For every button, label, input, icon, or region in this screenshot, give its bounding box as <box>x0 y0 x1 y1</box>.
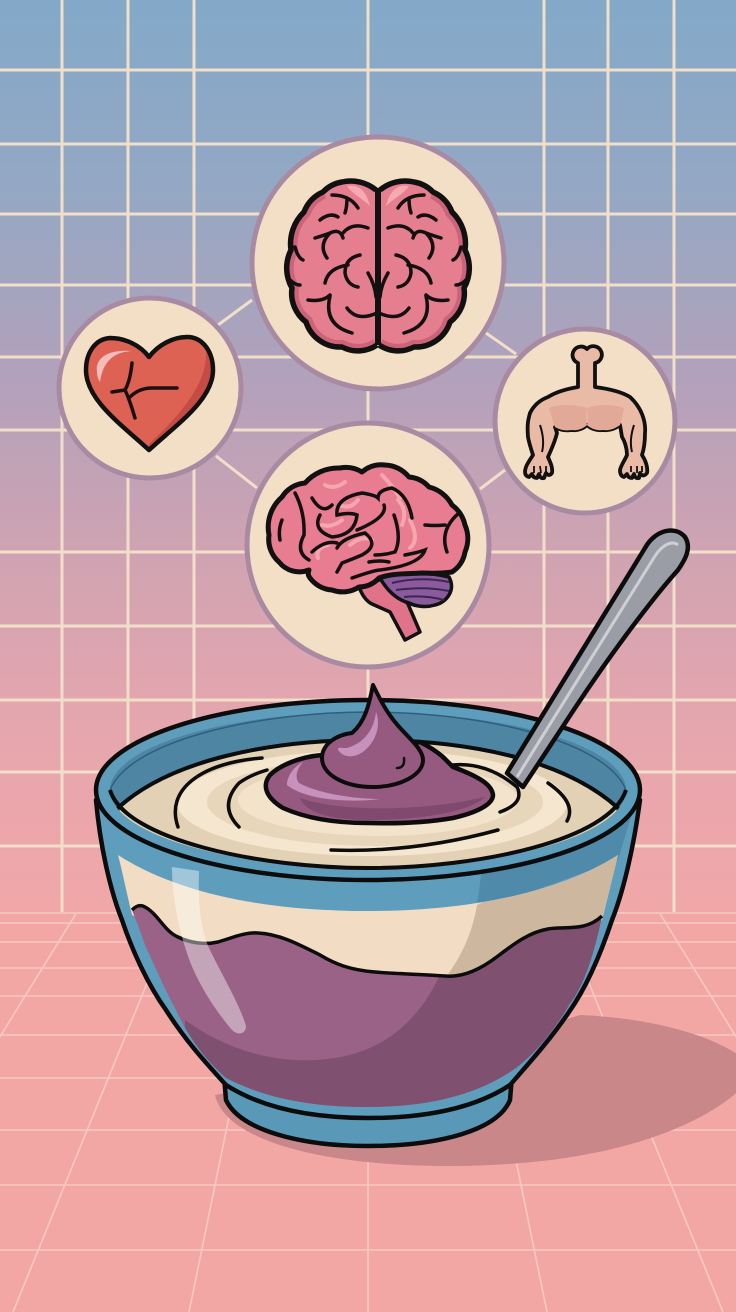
purple layer <box>132 906 602 1107</box>
cream layer <box>118 855 618 990</box>
rim outer <box>96 700 640 880</box>
purple shadow <box>185 918 602 1107</box>
rim inner top line <box>110 712 626 790</box>
pudding surface <box>116 739 620 866</box>
spoon <box>507 530 688 787</box>
icon: arms and bone <box>525 346 647 478</box>
wave line <box>132 906 602 976</box>
connector lines <box>216 300 516 489</box>
panel: arm muscle circle <box>495 329 675 513</box>
bowl shadow <box>215 1015 736 1166</box>
icon: brain side view <box>268 465 468 640</box>
bowl <box>96 700 640 1146</box>
icon: cracked heart <box>86 337 213 450</box>
bowl body <box>96 800 640 1118</box>
cream shaded side <box>448 855 618 974</box>
panel: side brain circle <box>247 423 489 667</box>
floor edge <box>0 912 736 914</box>
icon: brain top view <box>287 181 469 351</box>
swirl lines <box>175 758 570 850</box>
glass highlight <box>172 867 246 1033</box>
rim inner lower line <box>110 790 626 868</box>
panel: heart circle <box>59 298 241 478</box>
purple dollop <box>266 685 493 823</box>
wall grid <box>0 0 736 912</box>
bowl foot <box>224 1076 512 1146</box>
floor <box>0 912 736 1312</box>
band shade <box>476 800 636 912</box>
rim inner wall <box>110 712 626 868</box>
panel: top brain circle <box>252 137 504 389</box>
floor tile grid <box>0 912 736 1312</box>
background wall <box>0 0 736 914</box>
